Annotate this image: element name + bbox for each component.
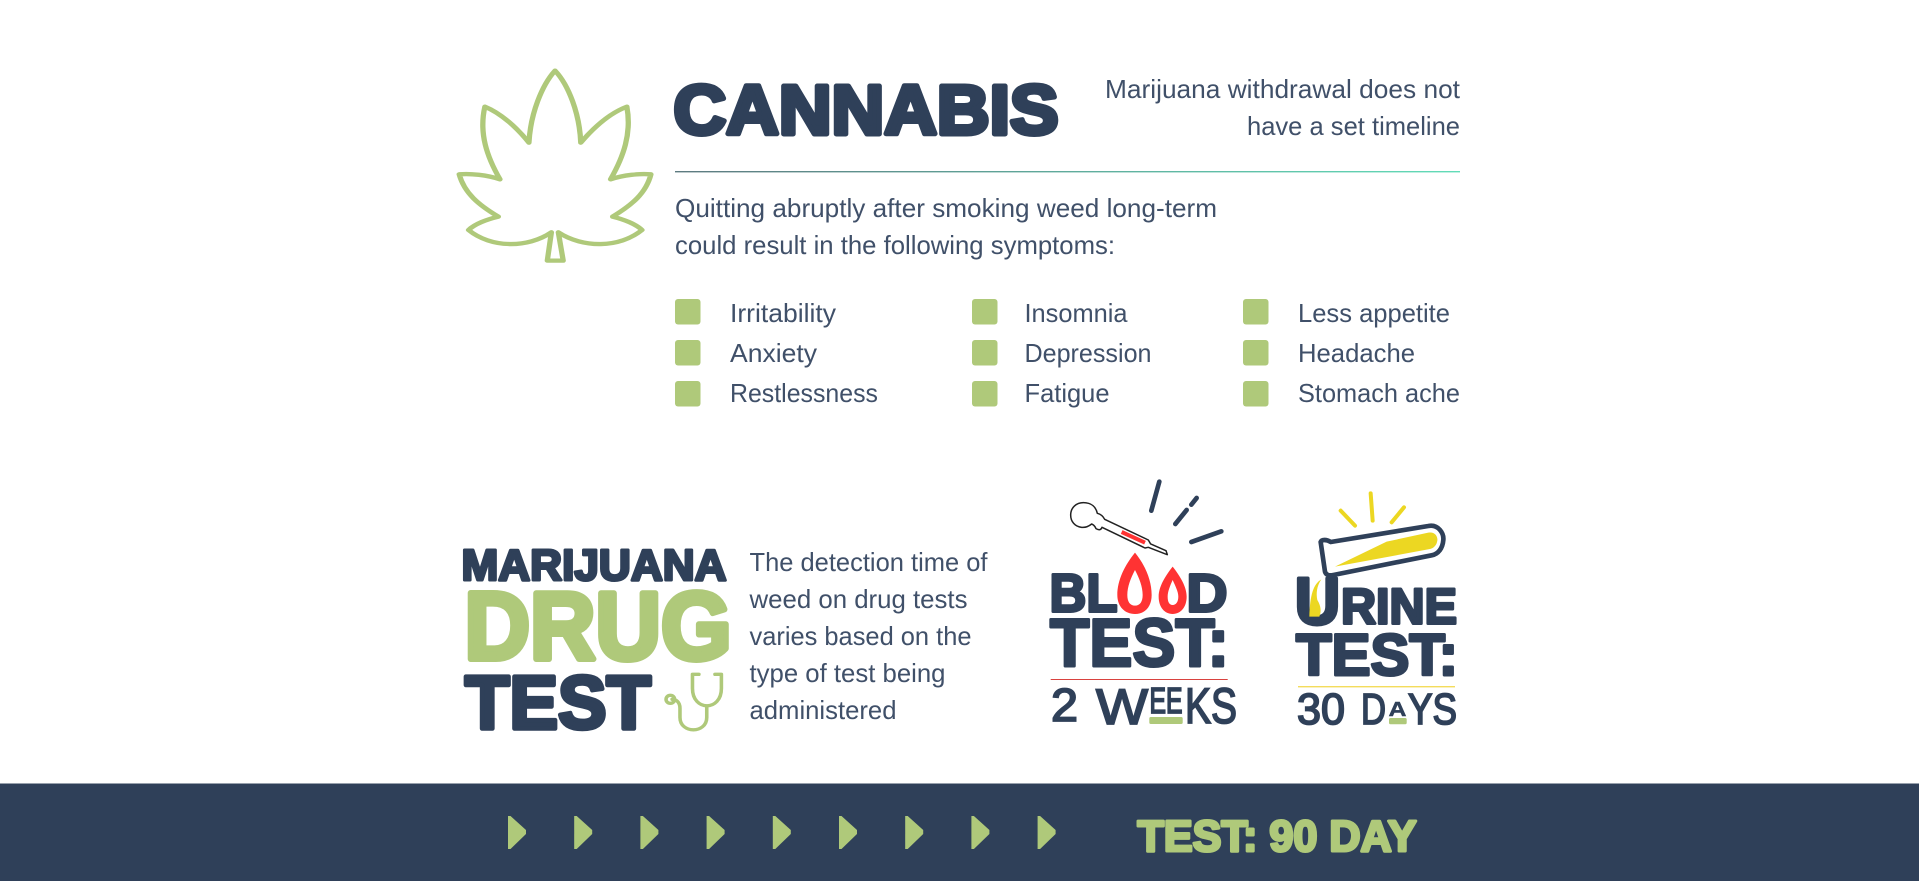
- text: symptoms intro: Quitting abruptly after smoking weed long-term: [675, 193, 1217, 223]
- text: detection time: weed on drug tests: [749, 584, 968, 614]
- text: withdrawal note: Marijuana withdrawal does not: [1105, 74, 1461, 104]
- symptom column 3: Stomach ache: [1298, 378, 1460, 408]
- text: test 90 day: TEST: 90 DAY: [1138, 812, 1416, 861]
- icon: test tube: [1321, 493, 1443, 575]
- icon: blood dropper: [1071, 482, 1221, 555]
- text: urine test: TEST:: [1296, 623, 1458, 688]
- heading: marijuana drug test: TEST: [465, 660, 651, 744]
- text: blood test: TEST:: [1050, 605, 1229, 681]
- symptom column 3: [1243, 298, 1460, 408]
- text: detection time: varies based on the: [750, 621, 972, 651]
- text: withdrawal note: have a set timeline: [1247, 111, 1460, 141]
- symptom column 1: [675, 298, 878, 408]
- text: detection time: type of test being: [750, 658, 946, 688]
- arrows: [508, 816, 1056, 849]
- text: urine test: RINE: [1341, 578, 1457, 634]
- text: 2 weeks: EE: [1150, 680, 1182, 721]
- symptom column 1: Anxiety: [730, 338, 817, 368]
- icon: stethoscope: [666, 674, 721, 730]
- text: urine test: [1295, 564, 1458, 688]
- symptom column 2: Insomnia: [1024, 298, 1128, 328]
- text: urine test: U: [1295, 564, 1340, 638]
- symptom column 2: Depression: [1024, 338, 1152, 368]
- icon: urine drip: [1309, 579, 1321, 617]
- symptom column 1: Restlessness: [730, 378, 878, 408]
- text: detection time: administered: [750, 695, 896, 725]
- text: symptoms intro: [675, 193, 1217, 260]
- text: detection time: The detection time of: [750, 547, 988, 577]
- text: 30 days: YS: [1408, 685, 1457, 734]
- icon: blood drops: [1117, 553, 1187, 614]
- icon: cannabis leaf: [459, 71, 651, 261]
- urine test panel: [1295, 493, 1458, 734]
- text: 2 weeks: 2: [1051, 679, 1078, 731]
- text: withdrawal note: [1105, 74, 1461, 141]
- symptom column 3: Less appetite: [1298, 298, 1450, 328]
- symptom column 3: Headache: [1298, 338, 1415, 368]
- text: 30 days: A: [1388, 699, 1406, 721]
- text: blood test: BL: [1050, 564, 1118, 624]
- symptom column 2: Fatigue: [1024, 378, 1110, 408]
- heading: marijuana drug test: MARIJUANA: [462, 541, 726, 590]
- symptom column 2: [972, 298, 1152, 408]
- heading: marijuana drug test: [462, 541, 732, 744]
- heading: cannabis: CANNABIS: [674, 71, 1058, 149]
- blood test panel: [1050, 482, 1237, 735]
- text: blood test: [1050, 564, 1229, 681]
- text: 30 days: D: [1361, 685, 1386, 734]
- text: 2 weeks: W: [1096, 679, 1149, 735]
- text: 30 days: 30: [1297, 685, 1345, 734]
- text: 2 weeks: KS: [1185, 678, 1237, 734]
- symptom list: [675, 298, 1460, 408]
- text: symptoms intro: could result in the following symptoms:: [675, 230, 1115, 260]
- heading: marijuana drug test: DRUG: [464, 573, 732, 680]
- text: blood test: D: [1186, 564, 1228, 624]
- symptom column 1: Irritability: [730, 298, 836, 328]
- text: 2 weeks: [1051, 678, 1237, 735]
- text: 30 days: [1297, 685, 1457, 734]
- footer band: [0, 784, 1919, 881]
- text: detection time: [749, 547, 988, 725]
